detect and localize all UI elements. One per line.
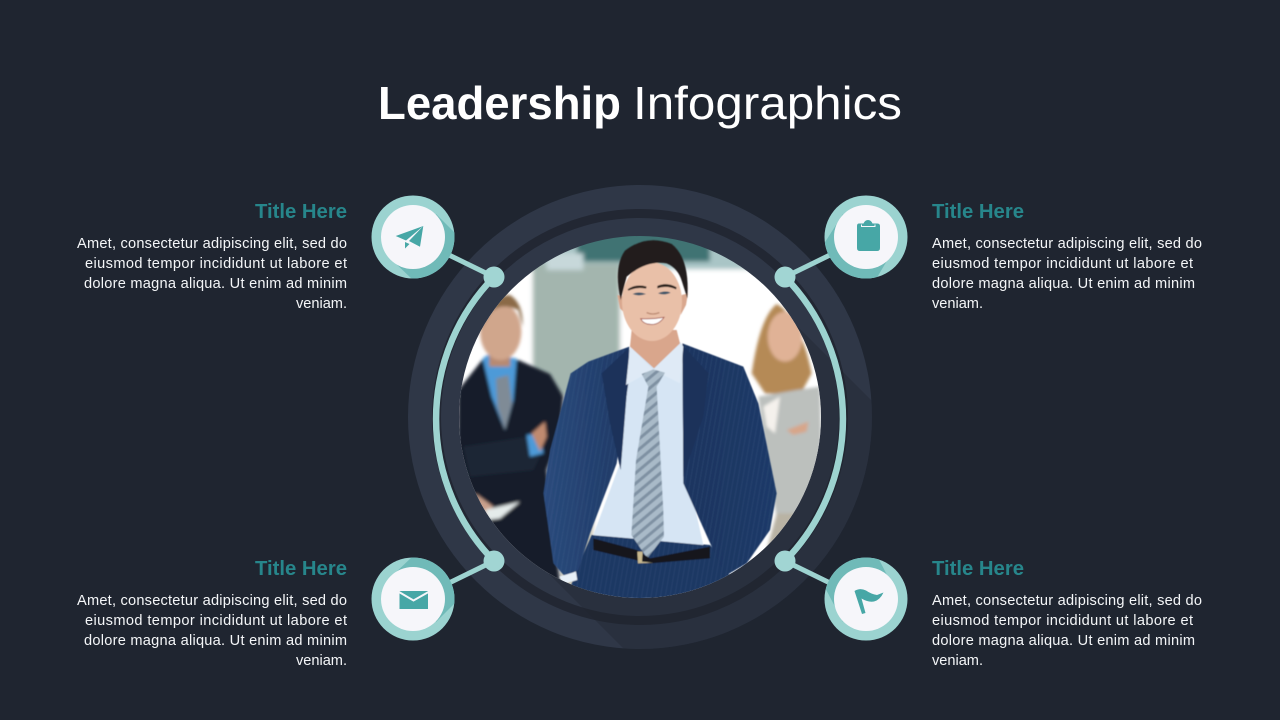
connector: left arc [436,277,494,561]
text block: top left: Amet, consectetur adipiscing elit, sed do [77,236,347,252]
text block: bottom right: Title Here [932,557,1024,580]
shirt [593,347,703,545]
main figure [543,240,777,610]
lapels [602,345,709,477]
text block: bottom left: eiusmod tempor incididunt ut labore et [85,613,347,629]
text block: bottom right: dolore magna aliqua. Ut enim ad minim [932,633,1195,649]
icon: envelope [372,558,454,640]
trousers [570,534,730,598]
title: Infographics [633,77,902,129]
text block: top right: eiusmod tempor incididunt ut labore et [932,256,1193,272]
connector: right arc [785,277,843,561]
icon: flag [824,558,908,640]
collar [626,342,683,385]
text block: top left: dolore magna aliqua. Ut enim ad minim [84,276,347,292]
neck [630,330,680,368]
belt [593,538,710,563]
face [622,262,682,341]
nose [647,313,659,314]
ears [617,293,688,315]
brows [628,284,677,291]
text block: top left [77,200,347,312]
cuff [559,572,577,584]
title: Leadership [378,77,621,129]
text block: bottom left: dolore magna aliqua. Ut enim ad minim [84,633,347,649]
text block: bottom left: Title Here [255,557,347,580]
text block: top right: veniam. [932,296,983,312]
central ring with long shadow [408,185,872,649]
text block: top left: Title Here [255,200,347,223]
jacket [543,343,777,577]
text block: top right: Title Here [932,200,1024,223]
text block: bottom right [932,557,1202,669]
smile [641,317,664,324]
connector: top right [774,255,830,288]
photo backdrop [450,230,830,610]
hair [618,240,688,300]
icon: clipboard [824,196,908,278]
text block: bottom left [77,557,347,669]
connector: bottom left [449,550,504,583]
photo: three business people [450,230,830,610]
icon: paper plane [372,196,454,278]
right colleague [752,304,822,550]
text block: top left: eiusmod tempor incididunt ut labore et [85,256,347,272]
text block: bottom right: eiusmod tempor incididunt ut labore et [932,613,1193,629]
text block: bottom left: Amet, consectetur adipiscing elit, sed do [77,593,347,609]
text block: top right: Amet, consectetur adipiscing elit, sed do [932,236,1202,252]
connector: bottom right [774,550,830,583]
text block: bottom right: Amet, consectetur adipiscing elit, sed do [932,593,1202,609]
eyes [633,291,671,295]
text block: top right [932,200,1202,312]
text block: bottom right: veniam. [932,653,983,669]
left colleague [457,295,563,610]
text block: bottom left: veniam. [296,653,347,669]
text block: top right: dolore magna aliqua. Ut enim ad minim [932,276,1195,292]
connector: top left [449,255,504,288]
tie [631,369,665,558]
text block: top left: veniam. [296,296,347,312]
